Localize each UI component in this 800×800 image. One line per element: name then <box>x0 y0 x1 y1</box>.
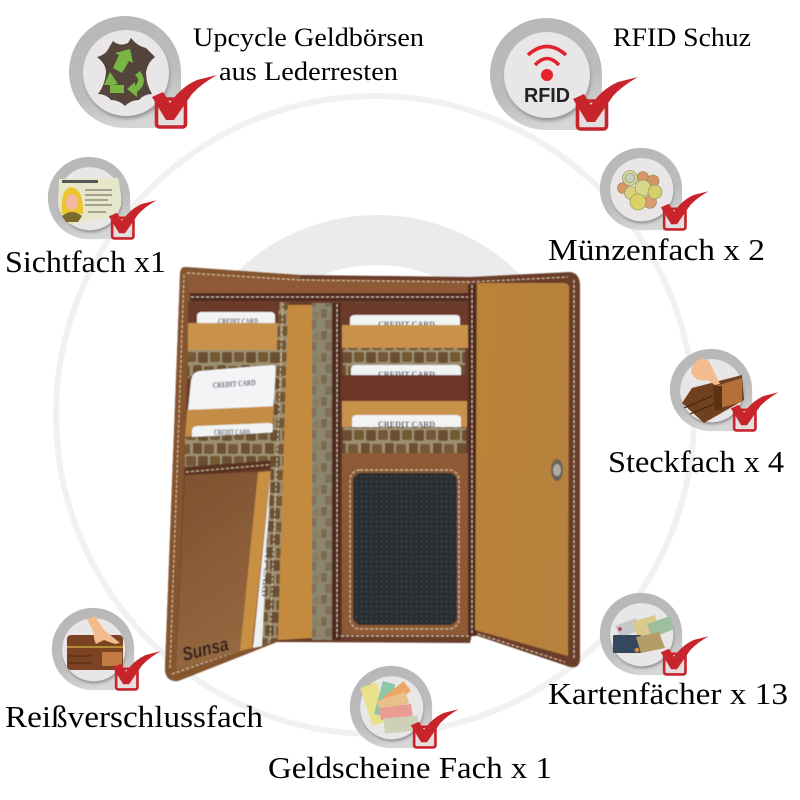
left edge <box>165 267 300 681</box>
vertical card <box>253 470 279 648</box>
icon: ID card <box>58 178 121 224</box>
badge: ID card <box>48 157 157 239</box>
badge: upcycled leather <box>69 16 217 128</box>
icon: leather hide <box>97 38 155 106</box>
divider strip <box>468 284 476 636</box>
label: upcycled wallets: Upcycle Geldbörsen <box>193 23 424 52</box>
right pockets: CREDIT CARD <box>378 420 435 429</box>
wallet body <box>165 267 580 681</box>
badge: banknotes <box>350 666 459 748</box>
badge: RFID: RFID <box>524 85 570 107</box>
label: slot pocket: Steckfach x 4 <box>608 444 785 479</box>
card: tilted <box>188 365 277 410</box>
icon: RFID waves <box>528 46 566 65</box>
card <box>197 312 275 323</box>
icon: portrait <box>62 187 83 214</box>
brand: Sunsa <box>180 634 231 666</box>
icon: coins <box>618 170 662 210</box>
label: zip pocket: Reißverschlussfach <box>5 699 264 734</box>
label: card slots: Kartenfächer x 13 <box>548 676 788 711</box>
centre tan panel <box>278 305 312 640</box>
outer ring <box>56 96 694 734</box>
right pockets: CREDIT CARD <box>378 320 435 329</box>
left pockets: CREDIT CARD <box>214 428 250 437</box>
label: banknote pocket: Geldscheine Fach x 1 <box>268 750 552 785</box>
mesh window <box>353 473 457 625</box>
label: coin pocket: Münzenfach x 2 <box>548 232 765 267</box>
label: window pocket: Sichtfach x1 <box>5 244 166 279</box>
badge: zip pocket <box>52 608 161 690</box>
snap button <box>551 459 563 481</box>
right flap <box>475 283 569 656</box>
icon: recycling arrows <box>104 49 144 97</box>
label: upcycled wallets <box>193 23 424 86</box>
icon: zipped wallet <box>67 635 123 670</box>
badge: coins <box>600 148 709 230</box>
lower left pocket <box>176 472 258 671</box>
left pockets: CREDIT CARD <box>218 317 258 326</box>
left pockets <box>176 302 280 671</box>
card: tilted: CREDIT CARD <box>213 378 256 390</box>
icon: banknotes <box>360 681 419 733</box>
wallet photo <box>165 267 580 681</box>
label: upcycled wallets: aus Lederresten <box>219 57 398 86</box>
icon: wallet and hand <box>682 375 744 423</box>
right pockets: CREDIT CARD <box>378 370 435 379</box>
spine <box>312 303 332 640</box>
inner ring <box>201 240 553 592</box>
right pockets <box>341 305 470 636</box>
label: RFID: RFID Schuz <box>613 23 751 52</box>
left pockets: CREDIT CARD <box>260 525 275 598</box>
top band <box>186 272 470 293</box>
badge: slot pocket <box>670 349 779 431</box>
badge: cards <box>600 593 709 675</box>
stitched strip <box>262 302 289 646</box>
badge: RFID <box>490 18 638 130</box>
icon: credit cards <box>615 618 641 638</box>
